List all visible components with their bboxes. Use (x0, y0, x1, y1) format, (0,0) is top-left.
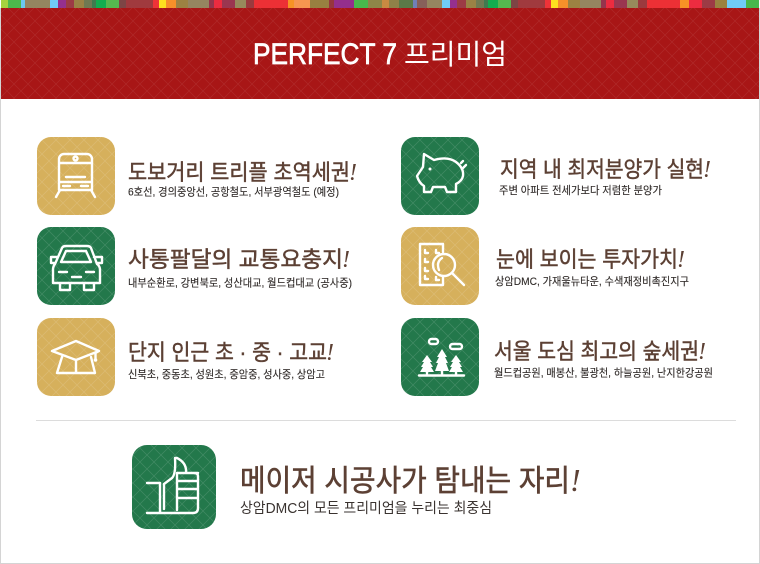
icon: train (37, 137, 115, 215)
heading: 메이저 시공사가 탐내는 자리 (240, 465, 570, 498)
text block: 상암DMC의 모든 프리미엄을 누리는 최중심 (240, 500, 492, 517)
panel: transport hub (37, 227, 352, 305)
title: 프리미엄 (404, 39, 507, 70)
text block: 주변 아파트 전세가보다 저렴한 분양가 (499, 184, 662, 197)
heading: 사통팔달의 교통요충지 (128, 247, 343, 272)
icon: thumbs up (132, 445, 216, 529)
text block: 상암DMC, 가재울뉴타운, 수색재정비촉진지구 (495, 275, 689, 288)
text block: 월드컵공원, 매봉산, 불광천, 하늘공원, 난지한강공원 (494, 366, 713, 380)
text block: 신북초, 중동초, 성원초, 중암중, 성사중, 상암고 (128, 368, 325, 381)
panel: walkable triple station area (37, 137, 357, 215)
heading: 지역 내 최저분양가 실현 (500, 157, 704, 182)
heading: ! (570, 462, 581, 498)
heading: ! (349, 160, 357, 186)
title: PERFECT 7 (253, 38, 397, 71)
heading: 도보거리 트리플 초역세권 (128, 160, 350, 185)
text block: 내부순환로, 강변북로, 성산대교, 월드컵대교 (공사중) (128, 276, 352, 290)
panel: lowest price (401, 137, 711, 215)
icon: graduation cap (37, 318, 115, 396)
heading: 서울 도심 최고의 숲세권 (494, 339, 699, 364)
heading: ! (698, 339, 706, 365)
heading: ! (703, 157, 711, 183)
text block: 6호선, 경의중앙선, 공항철도, 서부광역철도 (예정) (128, 186, 339, 198)
heading: 단지 인근 초 · 중 · 고교 (128, 340, 327, 365)
title (253, 38, 507, 71)
panel: forest area (401, 318, 713, 396)
heading: ! (677, 247, 685, 273)
panel: investment value (401, 227, 689, 305)
icon: car (37, 227, 115, 305)
title banner (1, 8, 759, 99)
heading: 눈에 보이는 투자가치 (496, 247, 678, 272)
panel: schools nearby (37, 318, 334, 396)
icon: building and magnifier (401, 227, 479, 305)
colour stripe (1, 0, 759, 8)
icon: trees (401, 318, 479, 396)
icon: piggy bank (401, 137, 479, 215)
heading: ! (326, 340, 334, 366)
heading: ! (342, 247, 350, 273)
panel: major builder location (132, 445, 581, 529)
